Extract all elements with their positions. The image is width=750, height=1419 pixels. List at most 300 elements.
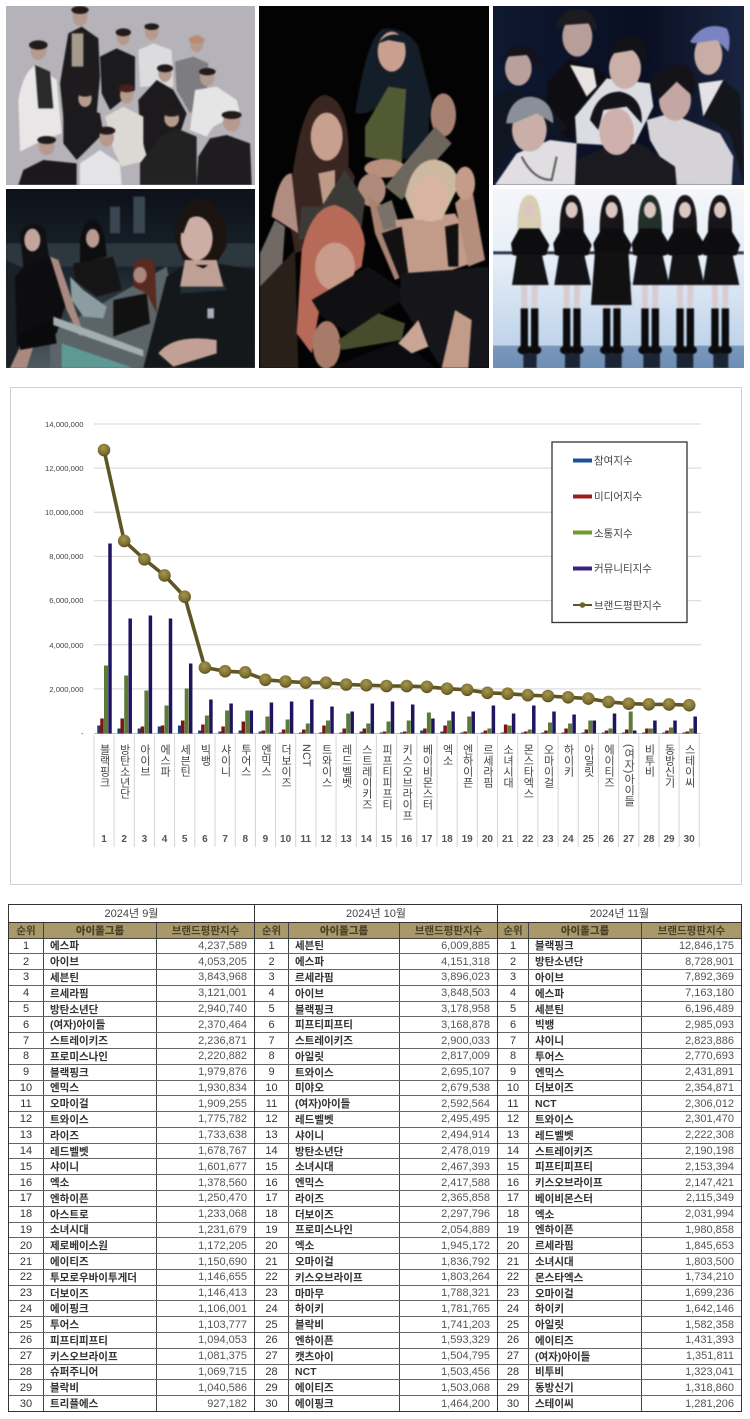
table: September 2024 ranking: 1,678,767: [198, 1145, 247, 1157]
category labels: rank numbers: 20: [482, 834, 493, 845]
y axis labels: 10,000,000: [45, 508, 84, 517]
table: September 2024 ranking: 1,040,586: [198, 1382, 247, 1394]
table: September 2024 ranking: 6: [23, 1019, 29, 1031]
table: October 2024 ranking: 방탄소년단: [295, 1146, 343, 1158]
category labels: rank numbers: 15: [381, 834, 392, 845]
table: November 2024 ranking: 10: [507, 1082, 519, 1094]
table: November 2024 ranking: 1,980,858: [685, 1224, 734, 1236]
category labels: group names: NCT: [300, 744, 312, 767]
column headers: 아이돌그룹: [76, 924, 124, 936]
table: September 2024 ranking: 30: [20, 1398, 32, 1410]
table: September 2024 ranking: 27: [20, 1350, 32, 1362]
category labels: group names: 오마이걸: [542, 744, 554, 788]
table: October 2024 ranking: 프로미스나인: [295, 1224, 353, 1236]
table: October 2024 ranking: 28: [265, 1366, 278, 1378]
table: September 2024 ranking: 2,220,882: [198, 1050, 247, 1062]
table: October 2024 ranking: 10: [265, 1082, 278, 1094]
table: November 2024 ranking: 투어스: [535, 1051, 564, 1063]
table: September 2024 ranking: 1,146,655: [198, 1271, 247, 1283]
category labels: group names: 샤이니: [219, 744, 231, 777]
table: October 2024 ranking: 2,900,033: [441, 1035, 490, 1047]
table: November 2024 ranking: 1,351,811: [686, 1350, 734, 1362]
category labels: group names: 스트레이키즈: [360, 744, 372, 810]
table: November 2024 ranking: 방탄소년단: [535, 956, 583, 968]
table: September 2024 ranking: 25: [20, 1319, 32, 1331]
table: September 2024 ranking: 1,231,679: [198, 1224, 247, 1236]
table: November 2024 ranking: 17: [507, 1192, 519, 1204]
table: October 2024 ranking: 6: [268, 1019, 275, 1031]
table: November 2024 ranking: 15: [507, 1161, 519, 1173]
column headers: 순위: [503, 924, 523, 936]
table: November 2024 ranking: 13: [507, 1129, 519, 1141]
table: November 2024 ranking: 샤이니: [535, 1035, 564, 1047]
category labels: group names: 스테이씨: [683, 744, 695, 788]
category labels: rank numbers: 29: [663, 834, 675, 845]
category labels: group names: 블랙핑크: [98, 744, 110, 788]
category labels: rank numbers: 30: [684, 834, 695, 845]
table: November 2024 ranking: [497, 904, 742, 1412]
table: October 2024 ranking: 11: [266, 1098, 277, 1110]
table: September 2024 ranking: 스트레이키즈: [50, 1035, 108, 1047]
table: November 2024 ranking: 28: [507, 1366, 519, 1378]
table: September 2024 ranking: 24: [20, 1303, 32, 1315]
table: November 2024 ranking: 1,582,358: [685, 1319, 734, 1331]
table: November 2024 ranking: 2,301,470: [685, 1113, 734, 1125]
table: October 2024 ranking: 오마이걸: [295, 1256, 334, 1268]
table: November 2024 ranking: 2,031,994: [685, 1208, 734, 1220]
table: October 2024 ranking: 1,464,200: [441, 1398, 490, 1410]
table: October 2024 ranking: 3: [268, 971, 275, 983]
table: November 2024 ranking: 26: [507, 1334, 519, 1346]
category labels: rank numbers: 18: [442, 834, 453, 845]
table: November 2024 ranking: 2,823,886: [685, 1035, 734, 1047]
table: November 2024 ranking: 블랙핑크: [535, 940, 574, 952]
table: September 2024 ranking: 1,909,255: [198, 1098, 247, 1110]
table: September 2024 ranking: 에이핑크: [50, 1303, 89, 1315]
table: October 2024 ranking: 엔믹스: [295, 1177, 324, 1189]
category labels: group names: 엔하이픈: [461, 744, 473, 788]
table: October 2024 ranking: 2,054,889: [441, 1224, 490, 1236]
category labels: group names: 더보이즈: [280, 744, 292, 788]
category labels: group names: 아이브: [138, 744, 150, 777]
table: November 2024 ranking: 1,318,860: [685, 1382, 734, 1394]
column headers: 아이돌그룹: [561, 924, 609, 936]
table: November 2024 ranking: 6,196,489: [685, 1003, 734, 1015]
legend: 소통지수: [594, 528, 633, 540]
table: October 2024 ranking: 1,803,264: [441, 1271, 490, 1283]
table: September 2024 ranking: 2: [23, 956, 29, 968]
table: November 2024 ranking: 동방신기: [535, 1382, 574, 1394]
table: October 2024 ranking: 1,781,765: [441, 1303, 490, 1315]
table: September 2024 ranking: 1,172,205: [198, 1240, 247, 1252]
table: October 2024 ranking: 캣츠아이: [295, 1351, 334, 1363]
table: November 2024 ranking: 8: [510, 1050, 516, 1062]
table: September 2024 ranking: 1,069,715: [198, 1366, 247, 1378]
table: November 2024 ranking: 11: [507, 1098, 519, 1110]
table: September 2024 ranking: 프로미스나인: [50, 1051, 108, 1063]
table: November 2024 ranking: 23: [507, 1287, 519, 1299]
table: November 2024 ranking: 엑소: [535, 1209, 554, 1221]
category labels: group names: 동방신기: [663, 744, 675, 788]
category labels: rank numbers: 2: [121, 834, 127, 845]
table: October 2024 ranking: 6,009,885: [441, 940, 490, 952]
category labels: rank numbers: 5: [182, 834, 188, 845]
table: November 2024 ranking: 2,306,012: [685, 1098, 734, 1110]
table: September 2024 ranking: 10: [20, 1082, 32, 1094]
table: September 2024 ranking: 트리플에스: [50, 1398, 98, 1410]
table: October 2024 ranking: 30: [265, 1398, 278, 1410]
table: November 2024 ranking: 1,803,500: [685, 1256, 734, 1268]
table: September 2024 ranking: 17: [20, 1192, 32, 1204]
table: October 2024 ranking: 마마무: [295, 1288, 324, 1300]
table: October 2024 ranking: 3,168,878: [441, 1019, 490, 1031]
table: November 2024 ranking: 2,190,198: [685, 1145, 734, 1157]
table: November 2024 ranking: 12: [507, 1113, 519, 1125]
table: September 2024 ranking: 1,146,413: [198, 1287, 247, 1299]
table: November 2024 ranking: 4: [510, 987, 516, 999]
table: October 2024 ranking: 1,836,792: [441, 1256, 490, 1268]
bar series: participation, media, communication, community: [99, 544, 695, 734]
table: October 2024 ranking: 에이핑크: [295, 1398, 334, 1410]
category labels: group names: 빅뱅: [199, 744, 211, 766]
table: September 2024 ranking: 4: [23, 987, 29, 999]
table: November 2024 ranking: 2,153,394: [685, 1161, 734, 1173]
table: October 2024 ranking: 1,503,456: [441, 1366, 490, 1378]
category labels: group names: 투어스: [239, 744, 251, 777]
table: November 2024 ranking: 21: [507, 1256, 519, 1268]
table: October 2024 ranking: 29: [265, 1382, 278, 1394]
table: October 2024 ranking: 14: [265, 1145, 278, 1157]
table: October 2024 ranking: 에이티즈: [295, 1382, 334, 1394]
table: September 2024 ranking: 1,081,375: [198, 1350, 247, 1362]
table: September 2024 ranking: 엔하이픈: [50, 1193, 89, 1205]
table: November 2024 ranking: 19: [507, 1224, 519, 1236]
table: November 2024 ranking: 2,985,093: [685, 1019, 734, 1031]
table: November 2024 ranking: 에스파: [535, 988, 564, 1000]
y axis labels: 12,000,000: [45, 464, 84, 473]
category labels: rank numbers: 22: [522, 834, 534, 845]
table: November 2024 ranking: 18: [507, 1208, 519, 1220]
table: November 2024 ranking: 레드벨벳: [535, 1130, 574, 1142]
table: September 2024 ranking: 4,053,205: [198, 956, 247, 968]
category labels: rank numbers: 23: [542, 834, 554, 845]
table: November 2024 ranking: 엔믹스: [535, 1067, 564, 1079]
table: October 2024 ranking: 5: [268, 1003, 275, 1015]
table: September 2024 ranking: 15: [20, 1161, 32, 1173]
category labels: rank numbers: 4: [162, 834, 168, 845]
table: September 2024 ranking: 14: [20, 1145, 32, 1157]
table: November 2024 ranking: 12,846,175: [679, 940, 734, 952]
month heading: November: 2024년 11월: [590, 908, 649, 920]
month heading: November: [498, 905, 741, 922]
table: October 2024 ranking: 스트레이키즈: [295, 1035, 353, 1047]
category labels: group names: 비투비: [643, 744, 655, 777]
table: September 2024 ranking: 오마이걸: [50, 1098, 89, 1110]
column headers: 아이돌그룹: [320, 924, 368, 936]
table: October 2024 ranking: 23: [265, 1287, 278, 1299]
column headers: 브랜드평판지수: [415, 924, 482, 936]
table: November 2024 ranking: 1,734,210: [685, 1271, 734, 1283]
category labels: rank numbers: 24: [563, 834, 574, 845]
y axis labels: [45, 420, 84, 738]
column headers: 브랜드평판지수: [658, 924, 725, 936]
table: October 2024 ranking: 8: [268, 1050, 275, 1062]
category labels: rank numbers: 9: [263, 834, 269, 845]
category labels: rank numbers: 21: [502, 834, 514, 845]
table: September 2024 ranking: 1,094,053: [198, 1334, 247, 1346]
table: November 2024 ranking: 7: [510, 1035, 516, 1047]
table: October 2024 ranking: 1,593,329: [441, 1334, 490, 1346]
table: October 2024 ranking: 1,741,203: [441, 1319, 490, 1331]
table: October 2024 ranking: 17: [265, 1192, 278, 1204]
photo: girl group on a night rooftop: [6, 189, 255, 368]
table: September 2024 ranking: 에스파: [50, 940, 79, 952]
table: September 2024 ranking: [8, 904, 255, 1412]
table: November 2024 ranking: 24: [507, 1303, 519, 1315]
table: September 2024 ranking: 1,930,834: [198, 1082, 247, 1094]
table: October 2024 ranking: 2,478,019: [441, 1145, 490, 1157]
table: September 2024 ranking: 2,940,740: [198, 1003, 247, 1015]
category labels: rank numbers: 25: [583, 834, 594, 845]
category labels: rank numbers: 14: [361, 834, 372, 845]
table: September 2024 ranking: 12: [20, 1113, 32, 1125]
category labels: group names: 베이비몬스터: [421, 744, 433, 810]
legend: 커뮤니티지수: [594, 563, 652, 575]
table: November 2024 ranking: 스테이씨: [535, 1398, 574, 1410]
category labels: group names: 엑소: [441, 744, 453, 766]
table: September 2024 ranking: 피프티피프티: [50, 1335, 108, 1347]
table: October 2024 ranking: 레드벨벳: [295, 1114, 334, 1126]
category labels: rank numbers: 1: [101, 834, 107, 845]
table: October 2024 ranking: 9: [268, 1066, 275, 1078]
category labels: rank numbers: [101, 834, 695, 845]
category labels: rank numbers: 27: [623, 834, 635, 845]
column headers: 순위: [16, 924, 36, 936]
table: September 2024 ranking: 르세라핌: [50, 988, 89, 1000]
table: September 2024 ranking: 더보이즈: [50, 1288, 89, 1300]
table: November 2024 ranking: 2,770,693: [685, 1050, 734, 1062]
table: October 2024 ranking: NCT: [295, 1366, 317, 1378]
table: October 2024 ranking: 더보이즈: [295, 1209, 334, 1221]
photo: seven-member boy group on dark navy: [493, 6, 744, 185]
table: October 2024 ranking: 1: [268, 940, 275, 952]
table: November 2024 ranking: 25: [507, 1319, 519, 1331]
table: November 2024 ranking: 8,728,901: [685, 956, 734, 968]
table: October 2024 ranking: 3,178,958: [441, 1003, 490, 1015]
table: November 2024 ranking: 16: [507, 1177, 519, 1189]
table: November 2024 ranking: 1,642,146: [685, 1303, 734, 1315]
table: November 2024 ranking: 아이브: [535, 972, 564, 984]
table: October 2024 ranking: 1,945,172: [441, 1240, 490, 1252]
table: September 2024 ranking: 2,236,871: [198, 1035, 247, 1047]
table: October 2024 ranking: 12: [265, 1113, 278, 1125]
table: September 2024 ranking: 22: [20, 1271, 32, 1283]
y axis labels: 14,000,000: [45, 420, 84, 429]
table: November 2024 ranking: 6: [510, 1019, 516, 1031]
table: October 2024 ranking: 16: [265, 1177, 278, 1189]
table: November 2024 ranking: 베이비몬스터: [535, 1193, 593, 1205]
category labels: rank numbers: 6: [202, 834, 208, 845]
table: October 2024 ranking: 18: [265, 1208, 278, 1220]
table: November 2024 ranking: 르세라핌: [535, 1240, 574, 1252]
table: October 2024 ranking: 4,151,318: [441, 956, 490, 968]
table: October 2024 ranking: 블랙핑크: [295, 1004, 334, 1016]
category labels: rank numbers: 8: [243, 834, 249, 845]
table: November 2024 ranking: 비투비: [535, 1366, 564, 1378]
table: October 2024 ranking: 에스파: [295, 956, 324, 968]
table: November 2024 ranking: 7,892,369: [685, 971, 734, 983]
category labels: rank numbers: 12: [320, 834, 332, 845]
category labels: group names: 엔믹스: [259, 744, 271, 777]
table: October 2024 ranking: 샤이니: [295, 1130, 324, 1142]
table: October 2024 ranking: 3,848,503: [441, 987, 490, 999]
table: October 2024 ranking: 25: [265, 1319, 278, 1331]
table: November 2024 ranking: 2,222,308: [685, 1129, 734, 1141]
table: October 2024 ranking: 27: [265, 1350, 278, 1362]
category labels: group names: 레드벨벳: [340, 744, 352, 788]
table: October 2024 ranking: 2,679,538: [441, 1082, 490, 1094]
table: October 2024 ranking: 트와이스: [295, 1067, 334, 1079]
y axis labels: -: [81, 729, 84, 738]
table: November 2024 ranking: 1,323,041: [685, 1366, 734, 1378]
table: November 2024 ranking: 하이키: [535, 1303, 564, 1315]
table: September 2024 ranking: 4,237,589: [198, 940, 247, 952]
table: September 2024 ranking: 7: [23, 1035, 29, 1047]
table: September 2024 ranking: 3: [23, 971, 29, 983]
table: November 2024 ranking: (여자)아이들: [535, 1351, 590, 1363]
table: September 2024 ranking: 28: [20, 1366, 32, 1378]
table: October 2024 ranking: 15: [265, 1161, 278, 1173]
table: September 2024 ranking: 16: [20, 1177, 32, 1189]
table: November 2024 ranking: 세븐틴: [535, 1004, 564, 1016]
table: September 2024 ranking: 레드벨벳: [50, 1146, 89, 1158]
category labels: rank numbers: 26: [603, 834, 614, 845]
line: brand reputation index with markers: [98, 444, 695, 712]
table: October 2024 ranking: 24: [265, 1303, 278, 1315]
table: September 2024 ranking: 29: [20, 1382, 32, 1394]
category labels: group names: 하이키: [562, 743, 574, 777]
table: September 2024 ranking: 세븐틴: [50, 972, 79, 984]
table: October 2024 ranking: 2,297,796: [441, 1208, 490, 1220]
category labels: group names: 키스오브라이프: [401, 744, 413, 821]
table: September 2024 ranking: 9: [23, 1066, 29, 1078]
month heading: September: [9, 905, 254, 922]
category labels: rank numbers: 17: [421, 834, 433, 845]
table: November 2024 ranking: 1,845,653: [685, 1240, 734, 1252]
table: November 2024 ranking: 2,115,349: [686, 1192, 734, 1204]
table: October 2024 ranking: 21: [265, 1256, 278, 1268]
table: October 2024 ranking: 1,503,068: [441, 1382, 490, 1394]
table: September 2024 ranking: 13: [20, 1129, 32, 1141]
table: September 2024 ranking: 1,103,777: [198, 1319, 247, 1331]
table: November 2024 ranking: 1,699,236: [685, 1287, 734, 1299]
table: November 2024 ranking: 키스오브라이프: [535, 1177, 603, 1189]
table: September 2024 ranking: 1,601,677: [198, 1161, 247, 1173]
photo: boy group in black and white suits on grey: [6, 6, 255, 185]
table: November 2024 ranking: 오마이걸: [535, 1288, 574, 1300]
table: October 2024 ranking: 1,504,795: [441, 1350, 490, 1362]
table: September 2024 ranking: 19: [20, 1224, 32, 1236]
category labels: rank numbers: 13: [341, 834, 352, 845]
table: September 2024 ranking: 1,775,782: [198, 1113, 247, 1125]
table: October 2024 ranking: 르세라핌: [295, 972, 334, 984]
category labels: group names: 트와이스: [320, 744, 332, 788]
table: October 2024 ranking: 2,817,009: [441, 1050, 490, 1062]
category labels: group names: 피프티피프티: [380, 744, 393, 810]
table: November 2024 ranking: 22: [507, 1271, 519, 1283]
table: November 2024 ranking: 5: [510, 1003, 516, 1015]
table: September 2024 ranking: 1,733,638: [198, 1129, 247, 1141]
category labels: group names: 세븐틴: [179, 744, 191, 777]
table: September 2024 ranking: 1,250,470: [198, 1192, 247, 1204]
table: November 2024 ranking: 2,354,871: [685, 1082, 734, 1094]
table: September 2024 ranking: 11: [20, 1098, 32, 1110]
category labels: group names: 몬스타엑스: [522, 744, 534, 799]
column headers: [9, 922, 254, 938]
table: October 2024 ranking: 블락비: [295, 1319, 324, 1331]
table: October 2024 ranking: 세븐틴: [295, 940, 324, 952]
category labels: group names: [98, 743, 695, 821]
table: September 2024 ranking: 키스오브라이프: [50, 1351, 118, 1363]
column headers: [255, 922, 497, 938]
table: September 2024 ranking: 투어스: [50, 1319, 79, 1331]
table: September 2024 ranking: 2,370,464: [198, 1019, 247, 1031]
table: October 2024 ranking: 1,788,321: [441, 1287, 490, 1299]
category labels: group names: 아일릿: [582, 744, 594, 777]
table: October 2024 ranking: (여자)아이들: [295, 1098, 350, 1110]
table: October 2024 ranking: 2: [268, 956, 275, 968]
table: October 2024 ranking: 4: [268, 987, 275, 999]
table: October 2024 ranking: 엑소: [295, 1240, 314, 1252]
panel: brand reputation chart: [10, 387, 742, 885]
table: October 2024 ranking: 2,467,393: [441, 1161, 490, 1173]
table: November 2024 ranking: 2,147,421: [685, 1177, 734, 1189]
table: October 2024 ranking: 하이키: [295, 1303, 324, 1315]
table: September 2024 ranking: 1,233,068: [198, 1208, 247, 1220]
table: September 2024 ranking: 엑소: [50, 1177, 69, 1189]
table: November 2024 ranking: 1: [510, 940, 516, 952]
category labels: rank numbers: 7: [222, 834, 228, 845]
photo: six-member girl group on pale blue wall: [493, 189, 744, 368]
table: October 2024 ranking: 소녀시대: [295, 1161, 334, 1173]
column headers: [498, 922, 741, 938]
table: November 2024 ranking: 에이티즈: [535, 1335, 574, 1347]
table: November 2024 ranking: 9: [510, 1066, 516, 1078]
table: October 2024 ranking: 26: [265, 1334, 278, 1346]
table: November 2024 ranking: 14: [507, 1145, 519, 1157]
month heading: October: [255, 905, 497, 922]
category labels: group names: 소녀시대: [502, 744, 514, 788]
table: October 2024 ranking: 2,494,914: [441, 1129, 490, 1141]
table: September 2024 ranking: 1,979,876: [198, 1066, 247, 1078]
category labels: rank numbers: 28: [643, 834, 655, 845]
table: October 2024 ranking: 19: [265, 1224, 278, 1236]
table: September 2024 ranking: 샤이니: [50, 1161, 79, 1173]
table: September 2024 ranking: 26: [20, 1334, 32, 1346]
table: September 2024 ranking: 8: [23, 1050, 29, 1062]
table: November 2024 ranking: 7,163,180: [685, 987, 734, 999]
category labels: group names: 방탄소년단: [118, 744, 130, 799]
table: October 2024 ranking: 20: [265, 1240, 278, 1252]
table: November 2024 ranking: 30: [507, 1398, 519, 1410]
table: September 2024 ranking: 1,106,001: [198, 1303, 247, 1315]
table: September 2024 ranking: 제로베이스원: [50, 1240, 108, 1252]
table: September 2024 ranking: 에이티즈: [50, 1256, 89, 1268]
table: October 2024 ranking: 미야오: [295, 1082, 324, 1094]
table: November 2024 ranking: 29: [507, 1382, 519, 1394]
table: October 2024 ranking: 피프티피프티: [295, 1019, 353, 1031]
table: October 2024 ranking: 2,695,107: [441, 1066, 490, 1078]
